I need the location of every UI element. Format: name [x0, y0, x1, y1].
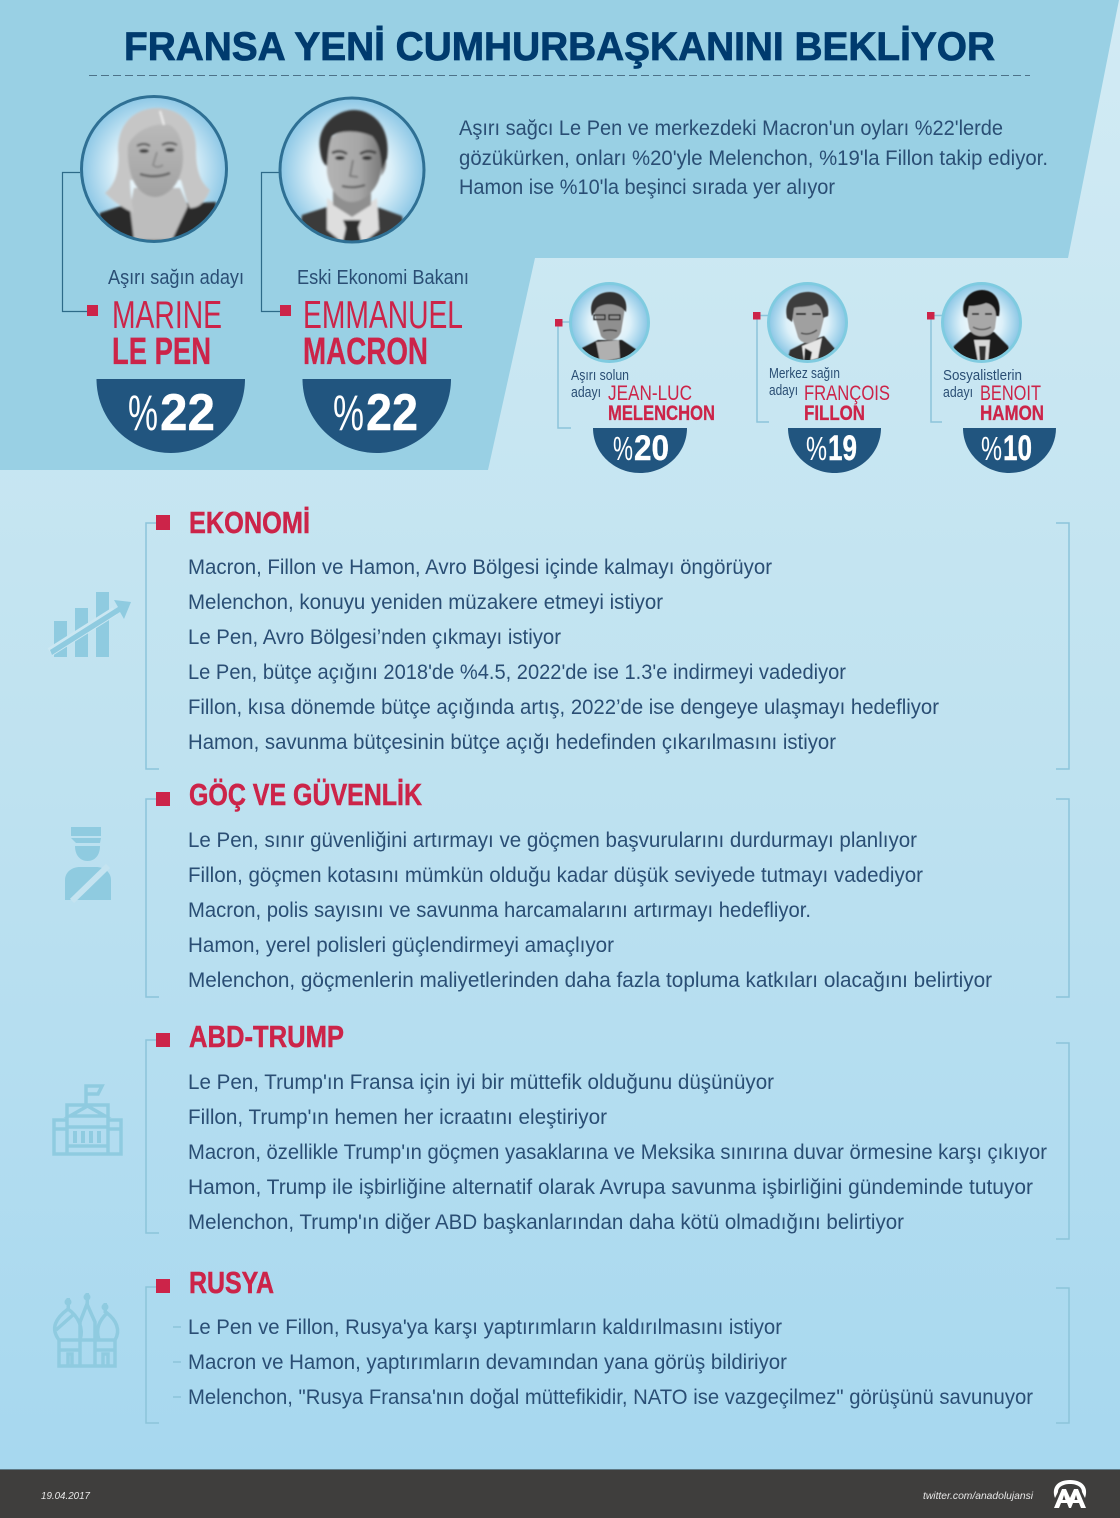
percentage badge: 20 — [634, 429, 669, 468]
label and name — [555, 319, 715, 425]
heading: Rusya: RUSYA — [189, 1265, 274, 1300]
percentage badge: % — [613, 430, 633, 467]
twitter handle: twitter.com/anadolujansi — [923, 1490, 1034, 1502]
top panel — [0, 0, 1119, 470]
percentage badge: 19 — [828, 429, 857, 468]
heading: Rusya — [156, 1265, 274, 1300]
candidate: Jean-Luc Melenchon — [555, 284, 715, 473]
section: Göç ve Güvenlik — [65, 777, 1069, 997]
label and name: Sosyalistlerin — [943, 368, 1022, 384]
text block: Ekonomi — [188, 555, 939, 754]
percentage badge: 22 — [160, 384, 215, 442]
portrait: Fillon — [768, 284, 846, 365]
footer bar — [0, 1469, 1120, 1518]
label and name: LE PEN — [112, 331, 211, 373]
percentage badge: % — [981, 430, 1002, 467]
text block: Ekonomi: Le Pen, Avro Bölgesi’nden çıkmayı istiyor — [188, 625, 561, 649]
label and name — [927, 312, 1044, 425]
label and name: MARINE — [112, 294, 222, 337]
label and name: FILLON — [804, 402, 865, 425]
section: Rusya — [55, 1265, 1069, 1423]
text block: ABD-Trump: Hamon, Trump ile işbirliğine alternatif olarak Avrupa savunma işbirliğini gündeminde tutuyor — [188, 1175, 1033, 1199]
label and name: BENOIT — [980, 382, 1041, 405]
label and name: Eski Ekonomi Bakanı — [297, 267, 469, 289]
intro text — [459, 116, 1048, 199]
text block: Ekonomi: Macron, Fillon ve Hamon, Avro Bölgesi içinde kalmayı öngörüyor — [188, 555, 772, 579]
intro text: Aşırı sağcı Le Pen ve merkezdeki Macron'un oyları %22'lerde — [459, 116, 1003, 140]
heading: Göç ve Güvenlik: GÖÇ VE GÜVENLİK — [189, 777, 422, 812]
label and name: Aşırı solun — [571, 368, 629, 384]
portrait: Melenchon — [570, 284, 648, 365]
percentage badge — [96, 379, 245, 453]
label and name: MACRON — [303, 331, 428, 373]
percentage badge: % — [128, 385, 158, 441]
text block: Rusya — [188, 1315, 1033, 1409]
portrait: Marine Le Pen — [82, 96, 226, 245]
intro text: Hamon ise %10'la beşinci sırada yer alıyor — [459, 175, 835, 199]
candidate: Marine Le Pen — [62, 96, 245, 453]
candidate: Emmanuel Macron — [262, 98, 469, 453]
text block: Ekonomi: Fillon, kısa dönemde bütçe açığında artış, 2022’de ise dengeye ulaşmayı hedefliyor — [188, 695, 939, 719]
section: ABD-Trump — [54, 1019, 1069, 1239]
percentage badge: 10 — [1003, 429, 1032, 468]
portrait: Emmanuel Macron — [280, 98, 424, 245]
label and name: adayı — [769, 383, 798, 399]
percentage badge — [963, 428, 1056, 473]
text block: ABD-Trump: Le Pen, Trump'ın Fransa için iyi bir müttefik olduğunu düşünüyor — [188, 1070, 774, 1094]
portrait: Hamon — [942, 284, 1020, 365]
label and name: HAMON — [980, 402, 1044, 425]
label and name — [753, 312, 890, 425]
text block: Göç ve Güvenlik: Hamon, yerel polisleri güçlendirmeyi amaçlıyor — [188, 933, 614, 957]
heading: Ekonomi — [156, 505, 310, 540]
heading: ABD-Trump: ABD-TRUMP — [189, 1019, 344, 1054]
icon: onion dome church — [55, 1293, 118, 1366]
candidate: François Fillon — [753, 284, 890, 473]
logo: AA — [1054, 1480, 1086, 1508]
section: Ekonomi — [50, 505, 1069, 769]
percentage badge — [593, 428, 687, 473]
text block: Göç ve Güvenlik — [188, 828, 992, 992]
text block: Göç ve Güvenlik: Macron, polis sayısını ve savunma harcamalarını artırmayı hedefliyor. — [188, 898, 811, 922]
text block: Göç ve Güvenlik: Melenchon, göçmenlerin maliyetlerinden daha fazla topluma katkıları olacağını belirtiyor — [188, 968, 992, 992]
title: FRANSA YENİ CUMHURBAŞKANINI BEKLİYOR — [124, 25, 995, 69]
text block: Göç ve Güvenlik: Le Pen, sınır güvenliğini artırmayı ve göçmen başvurularını durdurmayı planlıyor — [188, 828, 917, 852]
text block: Rusya: Macron ve Hamon, yaptırımların devamından yana görüş bildiriyor — [188, 1350, 787, 1374]
icon: police officer — [65, 827, 111, 901]
text block: Göç ve Güvenlik: Fillon, göçmen kotasını mümkün olduğu kadar düşük seviyede tutmayı vadediyor — [188, 863, 923, 887]
label and name: adayı — [571, 385, 601, 401]
text block: ABD-Trump — [188, 1070, 1047, 1234]
percentage badge: % — [333, 385, 364, 441]
label and name — [280, 267, 469, 373]
percentage badge: 22 — [366, 384, 418, 442]
label and name: FRANÇOIS — [804, 382, 890, 405]
text block: Rusya: Melenchon, "Rusya Fransa'nın doğal müttefikidir, NATO ise vazgeçilmez" görüşünü savunuyor — [188, 1385, 1033, 1409]
label and name: Merkez sağın — [769, 366, 840, 382]
percentage badge — [302, 379, 451, 453]
icon: government building — [54, 1086, 121, 1154]
text block: Ekonomi: Le Pen, bütçe açığını 2018'de %4.5, 2022'de ise 1.3'e indirmeyi vadediyor — [188, 660, 846, 684]
text block: ABD-Trump: Fillon, Trump'ın hemen her icraatını eleştiriyor — [188, 1105, 607, 1129]
text block: ABD-Trump: Melenchon, Trump'ın diğer ABD başkanlarından daha kötü olmadığını belirtiyor — [188, 1210, 904, 1234]
intro text: gözükürken, onları %20'yle Melenchon, %19'la Fillon takip ediyor. — [459, 146, 1048, 170]
text block: Ekonomi: Hamon, savunma bütçesinin bütçe açığı hedefinden çıkarılmasını istiyor — [188, 730, 836, 754]
text block: Rusya: Le Pen ve Fillon, Rusya'ya karşı yaptırımların kaldırılmasını istiyor — [188, 1315, 782, 1339]
candidate: Benoit Hamon — [927, 284, 1056, 473]
text block: Ekonomi: Melenchon, konuyu yeniden müzakere etmeyi istiyor — [188, 590, 663, 614]
label and name: MELENCHON — [608, 402, 715, 425]
heading: Ekonomi: EKONOMİ — [189, 505, 310, 540]
percentage badge: % — [806, 430, 827, 467]
text block: ABD-Trump: Macron, özellikle Trump'ın göçmen yasaklarına ve Meksika sınırına duvar örmesine karşı çıkıyor — [188, 1140, 1047, 1164]
label and name: EMMANUEL — [303, 294, 463, 337]
date: 19.04.2017 — [41, 1491, 90, 1502]
label and name: adayı — [943, 385, 973, 401]
icon: rising bar chart — [50, 592, 131, 657]
label and name: JEAN-LUC — [608, 382, 692, 405]
percentage badge — [788, 428, 881, 473]
label and name: Aşırı sağın adayı — [108, 267, 244, 289]
label and name — [87, 267, 244, 373]
